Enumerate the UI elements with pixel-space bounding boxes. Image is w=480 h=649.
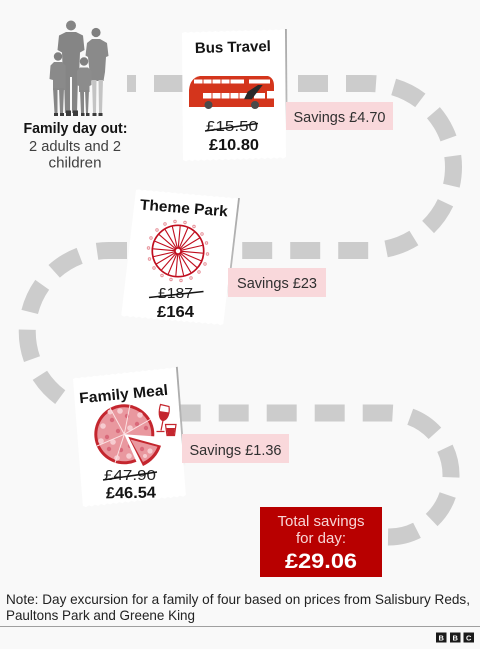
family caption: Family day out: (24, 121, 128, 137)
meal prices: £46.54 (106, 485, 156, 502)
theme park prices (149, 285, 204, 321)
BBC logo (436, 632, 474, 642)
BBC logo: C (466, 633, 472, 642)
total savings box: £29.06 (285, 550, 357, 573)
ticket: theme park (121, 189, 240, 326)
BBC logo: B (438, 633, 444, 642)
dashed route path (27, 84, 454, 537)
meal prices (103, 467, 157, 502)
savings label: theme park (228, 268, 326, 297)
icon: pizza (94, 404, 164, 472)
footnote (6, 591, 470, 623)
theme park prices: £164 (157, 304, 194, 321)
meal prices: £47.90 (104, 467, 156, 484)
icon: ferris wheel (147, 220, 209, 282)
ticket title: Theme Park: Theme Park (139, 197, 229, 220)
ticket title: Family Meal: Family Meal (78, 382, 169, 407)
savings label: meal: Savings £1.36 (190, 443, 282, 459)
footnote: Note: Day excursion for a family of four based on prices from Salisbury Reds, (6, 591, 470, 607)
family silhouette icon (50, 20, 108, 116)
ticket: family meal (73, 367, 188, 507)
family caption (24, 121, 128, 172)
family caption: 2 adults and 2 (29, 139, 121, 155)
ticket title: Bus Travel: Bus Travel (195, 38, 271, 57)
total savings box: Total savings (278, 514, 364, 530)
family caption: children (48, 156, 102, 172)
bus prices: £10.80 (209, 137, 259, 154)
total savings box: for day: (296, 531, 346, 547)
savings label: theme park: Savings £23 (237, 276, 317, 292)
savings label: bus (286, 102, 393, 130)
footnote: Paultons Park and Greene King (6, 607, 195, 623)
icon: red bus (189, 76, 274, 109)
icon: wine glass and tumbler (156, 404, 176, 436)
theme park prices: £187 (158, 285, 193, 302)
ticket: bus travel (182, 29, 288, 161)
total savings box (260, 507, 382, 577)
savings label: meal (182, 434, 289, 463)
bus prices: £15.50 (206, 118, 258, 135)
savings label: bus: Savings £4.70 (294, 110, 386, 126)
BBC logo: B (452, 633, 458, 642)
bus prices (205, 118, 259, 154)
